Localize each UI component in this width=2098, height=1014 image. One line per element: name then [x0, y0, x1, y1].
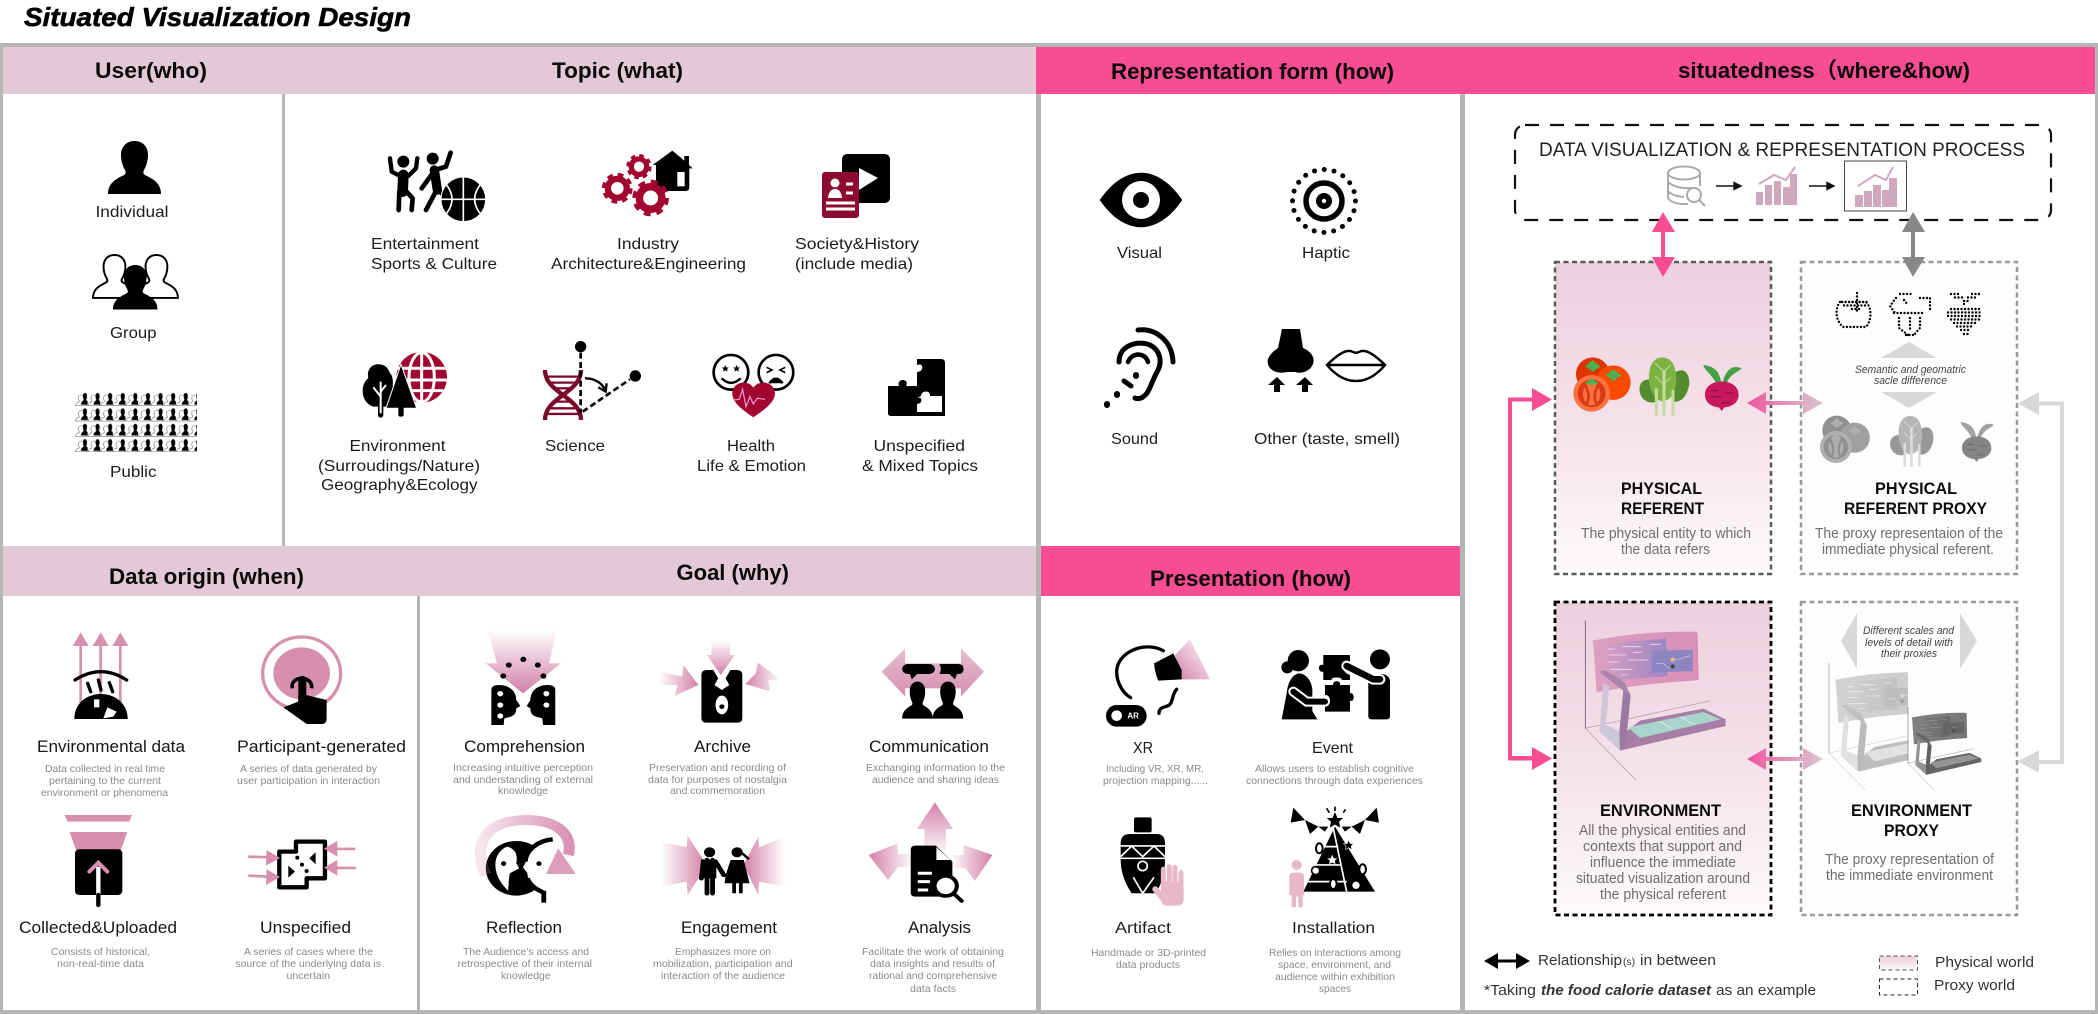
- icon: participant-generated: [263, 637, 341, 724]
- description: physical referent proxy: [1815, 526, 2003, 558]
- label: semantic difference: sacle difference: [1874, 375, 1947, 387]
- label: semantic difference: [1855, 364, 1966, 387]
- description: physical referent proxy: immediate physical referent.: [1822, 542, 1994, 558]
- panel: user: [3, 47, 282, 546]
- icon: installation: [1289, 807, 1379, 907]
- icon: society and history: [822, 154, 890, 218]
- label: health: Health: [727, 438, 775, 455]
- icon: environment: [363, 352, 447, 417]
- description: participant-generated: user participation in interaction: [237, 775, 380, 787]
- description: physical referent: [1581, 526, 1751, 558]
- title: physical referent: PHYSICAL: [1621, 479, 1702, 498]
- footnote: as an example: [1716, 983, 1816, 999]
- heading: data origin: Data origin (when): [109, 564, 304, 589]
- label: unspecified topics: [862, 438, 978, 475]
- illustration: treadmill: [1585, 621, 1726, 780]
- icon: gray foods: [1820, 416, 1994, 467]
- icon: sound ear: [1107, 330, 1173, 405]
- label: entertainment: Sports & Culture: [371, 256, 497, 273]
- title: physical referent: REFERENT: [1621, 499, 1705, 518]
- icon: puzzle: [888, 359, 945, 416]
- icon: dotted spinach: [1890, 294, 1930, 335]
- heading: presentation: Presentation (how): [1150, 566, 1351, 591]
- icon: dotted apple: [1837, 293, 1870, 327]
- description: environmental data: Data collected in real time: [45, 763, 165, 775]
- icon: engagement: [661, 836, 785, 895]
- title: physical referent proxy: PHYSICAL: [1875, 479, 1957, 498]
- description: installation: audience within exhibition: [1275, 971, 1395, 983]
- label: archive: Archive: [694, 737, 751, 756]
- illustration: large proxy treadmill: [1828, 663, 1908, 790]
- icon: group: [93, 255, 178, 310]
- title: physical referent proxy: REFERENT PROXY: [1844, 499, 1988, 518]
- legend: relationship: [1484, 953, 1716, 969]
- description: environment: [1576, 823, 1750, 903]
- label: engagement: Engagement: [681, 918, 777, 937]
- description: archive: and commemoration: [670, 785, 765, 797]
- description: unspecified origin: source of the underlying data is: [236, 958, 381, 970]
- description: XR: [1103, 763, 1208, 787]
- description: engagement: mobilization, participation and: [653, 958, 793, 970]
- icon: unspecified origin: [248, 841, 356, 887]
- label: other: Other (taste, smell): [1254, 431, 1400, 448]
- label: science: Science: [545, 438, 605, 455]
- title: physical referent: [1621, 479, 1705, 518]
- panel: representation form: [1036, 47, 1465, 546]
- icon: XR: [1106, 639, 1210, 727]
- description: environment proxy: [1825, 852, 1995, 884]
- description: analysis: Facilitate the work of obtaining: [862, 946, 1004, 958]
- panel: situatedness: [1465, 47, 2095, 1010]
- title: environment proxy: PROXY: [1884, 821, 1940, 840]
- label: sound: Sound: [1111, 431, 1158, 448]
- label: scales of detail: Different scales and: [1863, 625, 1955, 637]
- description: environment: situated visualization around: [1576, 871, 1750, 887]
- description: event: connections through data experiences: [1246, 775, 1423, 787]
- legend: relationship: Relationship: [1538, 953, 1622, 969]
- panel: presentation: [1041, 546, 1460, 1010]
- label: public: Public: [110, 464, 156, 481]
- arrow: referent to proxy: [1747, 392, 1823, 414]
- icon: visual eye: [1101, 174, 1181, 226]
- process box: [1515, 125, 2051, 220]
- description: analysis: data facts: [910, 983, 956, 995]
- description: archive: Preservation and recording of: [649, 762, 786, 774]
- label: unspecified origin: Unspecified: [260, 918, 351, 937]
- icon: reflection: [480, 820, 576, 903]
- description: communication: audience and sharing ideas: [872, 774, 999, 786]
- description: artifact: data products: [1116, 959, 1180, 971]
- description: collected and uploaded: [51, 946, 150, 970]
- panel: data origin: [3, 546, 420, 1010]
- icon: archive: [659, 640, 781, 723]
- description: XR: Including VR, XR, MR,: [1106, 763, 1204, 775]
- legend: proxy world: [1880, 978, 2015, 995]
- label: industry: [551, 236, 746, 273]
- description: environment: contexts that support and: [1583, 839, 1742, 855]
- arrow: environment to proxy: [1747, 748, 1823, 770]
- description: physical referent: The physical entity to which: [1581, 526, 1751, 542]
- icon: artifact: [1121, 817, 1184, 906]
- icon: smell and taste: [1268, 329, 1385, 392]
- label: society and history: (include media): [795, 256, 913, 273]
- description: engagement: interaction of the audience: [661, 970, 785, 982]
- label: unspecified topics: Unspecified: [874, 438, 965, 455]
- label: XR: XR: [1133, 740, 1153, 757]
- icon: analysis: [869, 802, 993, 901]
- description: collected and uploaded: Consists of historical,: [51, 946, 150, 958]
- label: scales of detail: levels of detail with: [1865, 637, 1953, 649]
- label: entertainment: Entertainment: [371, 236, 480, 253]
- icon: database: [1668, 166, 1705, 206]
- icon: spinach: [1639, 357, 1689, 416]
- process title: DATA VISUALIZATION & REPRESENTATION PROCESS: [1539, 140, 2025, 161]
- arrow: process to physical referent: [1652, 212, 1675, 277]
- description: analysis: [862, 946, 1004, 995]
- label: visual: Visual: [1117, 245, 1162, 262]
- illustration: small proxy treadmill: [1908, 707, 1981, 790]
- label: unspecified topics: & Mixed Topics: [862, 458, 978, 475]
- legend: relationship: in between: [1640, 953, 1716, 969]
- label: comprehension: Comprehension: [464, 737, 585, 756]
- heading: situatedness: situatedness（where&how): [1678, 58, 1970, 83]
- label: participant-generated: Participant-generated: [237, 737, 406, 756]
- panel: topic: [282, 47, 1036, 546]
- description: physical referent proxy: The proxy representaion of the: [1815, 526, 2003, 542]
- icon: haptic: [1292, 170, 1356, 232]
- icon: communication: [882, 648, 984, 719]
- label: health: Life & Emotion: [697, 458, 806, 475]
- description: comprehension: knowledge: [498, 785, 548, 797]
- label: industry: Industry: [617, 236, 679, 253]
- label: collected and uploaded: Collected&Uploaded: [19, 918, 177, 937]
- description: comprehension: and understanding of external: [453, 774, 593, 786]
- arrow: scale right: [1960, 613, 1977, 669]
- label: industry: Architecture&Engineering: [551, 256, 746, 273]
- label: group: Group: [110, 325, 157, 342]
- description: environmental data: environment or phenomena: [41, 787, 168, 799]
- box: environment: [1555, 602, 1771, 915]
- description: event: [1246, 763, 1423, 787]
- icon: dotted beet: [1948, 294, 1982, 334]
- box: physical referent proxy: [1801, 262, 2017, 574]
- legend: proxy world: Proxy world: [1934, 978, 2015, 994]
- description: collected and uploaded: non-real-time data: [57, 958, 144, 970]
- description: environment: the physical referent: [1600, 887, 1726, 903]
- icon: industry: [604, 151, 693, 214]
- icon: entertainment: [390, 153, 486, 222]
- description: participant-generated: [237, 763, 380, 787]
- label: entertainment: [371, 236, 497, 273]
- label: event: Event: [1312, 740, 1354, 757]
- label: environment: (Surroudings/Nature): [318, 458, 480, 475]
- icon: health: [714, 355, 793, 417]
- description: archive: data for purposes of nostalgia: [648, 774, 787, 786]
- description: comprehension: Increasing intuitive perception: [453, 762, 593, 774]
- description: comprehension: [453, 762, 593, 797]
- title: environment proxy: [1851, 801, 1973, 840]
- description: unspecified origin: [236, 946, 381, 982]
- label: society and history: Society&History: [795, 236, 919, 253]
- icon: individual: [108, 141, 161, 194]
- arrow: process to proxy: [1902, 212, 1925, 277]
- description: environment: influence the immediate: [1590, 855, 1736, 871]
- description: analysis: data insights and results of: [870, 958, 995, 970]
- label: artifact: Artifact: [1115, 920, 1172, 937]
- footnote: the food calorie dataset: [1541, 983, 1712, 999]
- arrow: step one: [1716, 182, 1741, 190]
- description: environment: All the physical entities and: [1579, 823, 1746, 839]
- description: reflection: The Audience's access and: [463, 946, 589, 958]
- description: environment proxy: The proxy representation of: [1825, 852, 1995, 868]
- arrow: step two: [1809, 182, 1834, 190]
- label: haptic: Haptic: [1302, 245, 1350, 262]
- description: reflection: knowledge: [501, 970, 551, 982]
- arrow: semantic up: [1881, 342, 1937, 358]
- box: physical referent: [1555, 262, 1771, 574]
- arrow: proxy to proxy: [2018, 392, 2064, 773]
- description: installation: spaces: [1319, 983, 1351, 995]
- label: installation: Installation: [1292, 920, 1375, 937]
- description: communication: Exchanging information to the: [866, 762, 1005, 774]
- description: installation: space, environment, and: [1278, 959, 1391, 971]
- label: reflection: Reflection: [486, 918, 562, 937]
- box: environment proxy: [1801, 602, 2017, 915]
- legend: physical world: Physical world: [1935, 955, 2034, 971]
- description: environmental data: pertaining to the current: [49, 775, 161, 787]
- label: communication: Communication: [869, 737, 989, 756]
- heading: user: User(who): [95, 58, 207, 83]
- panel: goal: [417, 546, 1036, 1010]
- icon: public crowd: [75, 391, 197, 452]
- description: event: Allows users to establish cognitive: [1255, 763, 1414, 775]
- heading: goal: Goal (why): [676, 560, 789, 585]
- description: physical referent: the data refers: [1621, 542, 1710, 558]
- description: communication: [866, 762, 1005, 786]
- icon: event: [1281, 649, 1390, 719]
- title: physical referent proxy: [1844, 479, 1988, 518]
- description: unspecified origin: A series of cases where the: [244, 946, 373, 958]
- icon: environmental data: [73, 632, 128, 719]
- icon: chart: [1756, 167, 1797, 205]
- label: health: [697, 438, 806, 475]
- title: Situated Visualization Design: [24, 2, 411, 32]
- label: analysis: Analysis: [908, 918, 971, 937]
- footnote: *Taking: [1484, 983, 1536, 999]
- icon: tomatoes: [1573, 357, 1631, 412]
- description: artifact: Handmade or 3D-printed: [1091, 947, 1206, 959]
- description: artifact: [1091, 947, 1206, 971]
- icon: comprehension: [486, 630, 561, 725]
- arrow: referent to environment: [1508, 388, 1552, 770]
- footnote: [1484, 983, 1816, 999]
- description: engagement: [653, 946, 793, 982]
- label: scales of detail: their proxies: [1881, 648, 1937, 660]
- description: reflection: [458, 946, 592, 982]
- description: installation: Relies on interactions among: [1269, 947, 1401, 959]
- heading: topic: Topic (what): [552, 58, 683, 83]
- description: analysis: rational and comprehensive: [869, 970, 997, 982]
- description: environmental data: [41, 763, 168, 799]
- description: installation: [1269, 947, 1401, 995]
- label: environment: Environment: [350, 438, 446, 455]
- label: environmental data: Environmental data: [37, 737, 186, 756]
- title: environment: ENVIRONMENT: [1600, 801, 1722, 820]
- label: semantic difference: Semantic and geomatric: [1855, 364, 1966, 376]
- icon: framed chart: [1844, 161, 1906, 211]
- description: reflection: retrospective of their internal: [458, 958, 592, 970]
- description: unspecified origin: uncertain: [286, 970, 330, 982]
- description: archive: [648, 762, 787, 797]
- label: society and history: [795, 236, 919, 273]
- arrow: scale left: [1841, 613, 1857, 669]
- description: engagement: Emphasizes more on: [675, 946, 771, 958]
- icon: beet: [1703, 365, 1742, 411]
- description: environment proxy: the immediate environment: [1826, 868, 1993, 884]
- title: environment proxy: ENVIRONMENT: [1851, 801, 1973, 820]
- label: environment: [318, 438, 480, 494]
- icon: XR: AR: [1127, 712, 1139, 721]
- icon: science: [545, 341, 641, 420]
- label: scales of detail: [1863, 625, 1955, 660]
- label: individual: Individual: [96, 204, 168, 221]
- description: XR: projection mapping......: [1103, 775, 1208, 787]
- arrow: semantic down: [1881, 392, 1937, 408]
- legend: relationship: (s): [1623, 957, 1635, 968]
- description: participant-generated: A series of data generated by: [240, 763, 378, 775]
- heading: representation form: Representation form (how): [1111, 59, 1394, 84]
- icon: collected and uploaded: [65, 815, 132, 905]
- legend: physical world: [1880, 955, 2034, 971]
- label: environment: Geography&Ecology: [321, 477, 478, 494]
